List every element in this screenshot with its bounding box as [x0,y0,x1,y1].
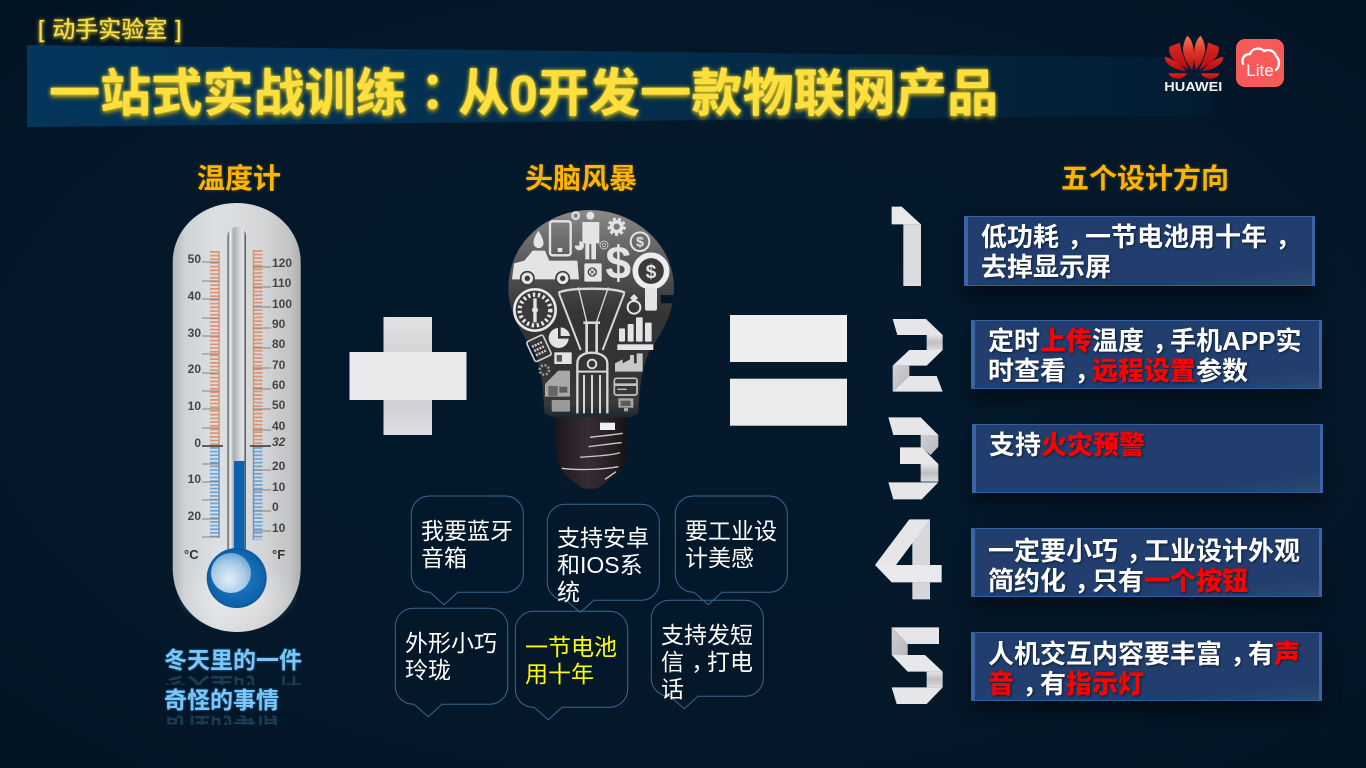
equals sign [730,315,847,426]
plus sign [350,317,466,435]
thermometer: 50 [188,252,201,266]
panel: direction 3 [972,424,1323,493]
thermometer: 90 [272,317,286,331]
speech bubble: 支持发短信，打电话 [651,600,763,709]
bubble text: 支持安卓和IOS系统: 和IOS系 [557,552,643,578]
factory [615,353,643,372]
bubble text: 外形小巧玲珑 [405,630,497,683]
lab tag: [ 动手实验室 ] [38,16,182,42]
thermometer: 10 [188,399,201,413]
speech bubble: 我要蓝牙音箱 [411,496,523,605]
bubble text: 一节电池用十年: 用十年 [525,661,594,687]
thermometer: 20 [188,362,201,376]
calculator [526,335,552,362]
bubble text: 外形小巧玲珑: 外形小巧 [405,630,497,656]
bubble text: 要工业设计美感 [685,518,777,571]
small gear [572,212,579,219]
bubble text: 支持安卓和IOS系统: 支持安卓 [557,525,649,551]
thermometer: 10 [188,472,201,486]
reflection: 冬天里的一件: 冬天里的一件 [164,673,302,699]
reflection: 奇怪的事情: 奇怪的事情 [164,713,279,739]
numeral 1 [892,207,921,286]
caption: 冬天里的一件: 冬天里的一件 [164,647,302,673]
person [582,212,599,259]
thermometer: 30 [188,326,201,340]
bubble text: 支持安卓和IOS系统 [557,525,649,605]
thermometer: 110 [272,276,292,290]
credit card [614,378,637,395]
thermometer: 100 [272,297,292,311]
magnifier: $ [646,262,657,283]
coin: $ [636,234,644,250]
bubble text: 一节电池用十年: 一节电池 [525,634,617,660]
safe [584,263,602,282]
bulb cap [555,413,629,489]
bubble text: 支持发短信，打电话 [661,622,753,702]
panel: direction 4 [971,528,1322,597]
bubble text: 我要蓝牙音箱 [421,518,513,571]
thermometer: 20 [272,459,286,473]
thermometer: 40 [188,289,201,303]
thermometer: 20 [188,509,201,523]
title band [27,45,1211,127]
thermometer: 0 [194,436,201,450]
heading: 温度计: 温度计 [197,163,281,194]
monitor [618,398,633,411]
thermometer: 60 [272,378,286,392]
magnifier [635,255,667,311]
heading: 五个设计方向: 五个设计方向 [1061,163,1229,194]
speech bubble: 外形小巧玲珑 [395,608,508,717]
pie icon [549,327,570,348]
thermometer: 32 [272,435,286,449]
panel: direction 4: 一定要小巧 ，工业设计外观 [988,536,1300,566]
numeral 3 [888,417,938,499]
panel: direction 3: 支持火灾预警 [989,430,1145,460]
bubble text: 要工业设计美感: 计美感 [685,545,754,571]
title: 一站式实战训练：从0开发一款物联网产品 [49,52,998,126]
coin [631,232,649,251]
bubble text: 支持发短信，打电话: 信 ，打电 [661,649,753,675]
bubble text: 我要蓝牙音箱: 我要蓝牙 [421,518,513,544]
bubble text: 一节电池用十年 [525,634,617,687]
panel: direction 1 [964,216,1315,286]
copyright ring [600,241,608,249]
thermometer: 10 [272,480,286,494]
drop [534,231,543,248]
panel: direction 4: 简约化 ，只有一个按钮 [988,566,1248,596]
logo: Lite app icon: Lite [1246,61,1274,80]
thermometer: °C [184,547,199,562]
panel: direction 5 [971,632,1322,701]
clock [514,289,556,331]
panel: direction 5: 人机交互内容要丰富 ，有声 [988,639,1300,669]
panel: direction 2: 时查看 ，远程设置参数 [988,356,1248,386]
gear bottom [540,365,549,375]
panel: direction 5: 音 ，有指示灯 [988,669,1144,699]
thermometer: 120 [272,256,292,270]
speech bubble: 一节电池用十年 [515,611,628,720]
panel: direction 2: 定时上传温度 ，手机APP实 [988,326,1302,356]
thermometer: 80 [272,337,286,351]
bar chart icon [617,317,653,350]
panel: direction 1: 去掉显示屏 [981,252,1111,282]
phone [550,221,571,255]
thermometer: 10 [272,521,286,535]
bubble text: 外形小巧玲珑: 玲珑 [405,657,451,683]
logo: Huawei [1164,36,1223,94]
filament [558,287,625,413]
bubble text: 支持发短信，打电话: 支持发短 [661,622,753,648]
bubble text: 支持发短信，打电话: 话 [661,676,684,702]
numeral 5 [892,627,943,704]
panel: direction 1: 低功耗 ，一节电池用十年 ， [981,222,1301,252]
bubble text: 要工业设计美感: 要工业设 [685,518,777,544]
heading: 头脑风暴: 头脑风暴 [525,163,637,194]
house [545,371,570,397]
document [554,352,572,364]
speech bubble: 要工业设计美感 [675,496,787,605]
gear [609,219,624,234]
thermometer: 40 [272,419,286,433]
car [512,251,579,285]
big dollar: $ [606,236,631,288]
bulb glass [508,210,674,417]
light bulb with icons [508,210,674,489]
bubble text: 支持安卓和IOS系统: 统 [557,579,580,605]
numeral 2 [893,319,943,392]
bubble text: 我要蓝牙音箱: 音箱 [421,545,467,571]
ring [628,294,640,314]
small pie [575,241,584,250]
caption: 奇怪的事情: 奇怪的事情 [164,687,279,713]
tablet [552,400,570,412]
thermometer: °F [272,547,285,562]
speech bubble: 支持安卓和IOS系统 [547,504,659,612]
panel: direction 2 [971,320,1322,389]
thermometer [173,203,301,632]
thermometer: 70 [272,358,286,372]
thermometer: 50 [272,398,286,412]
logo: Lite app icon [1236,39,1284,87]
thermometer: 0 [272,500,279,514]
logo: Huawei: HUAWEI [1164,80,1222,94]
numeral 4 [875,519,942,599]
